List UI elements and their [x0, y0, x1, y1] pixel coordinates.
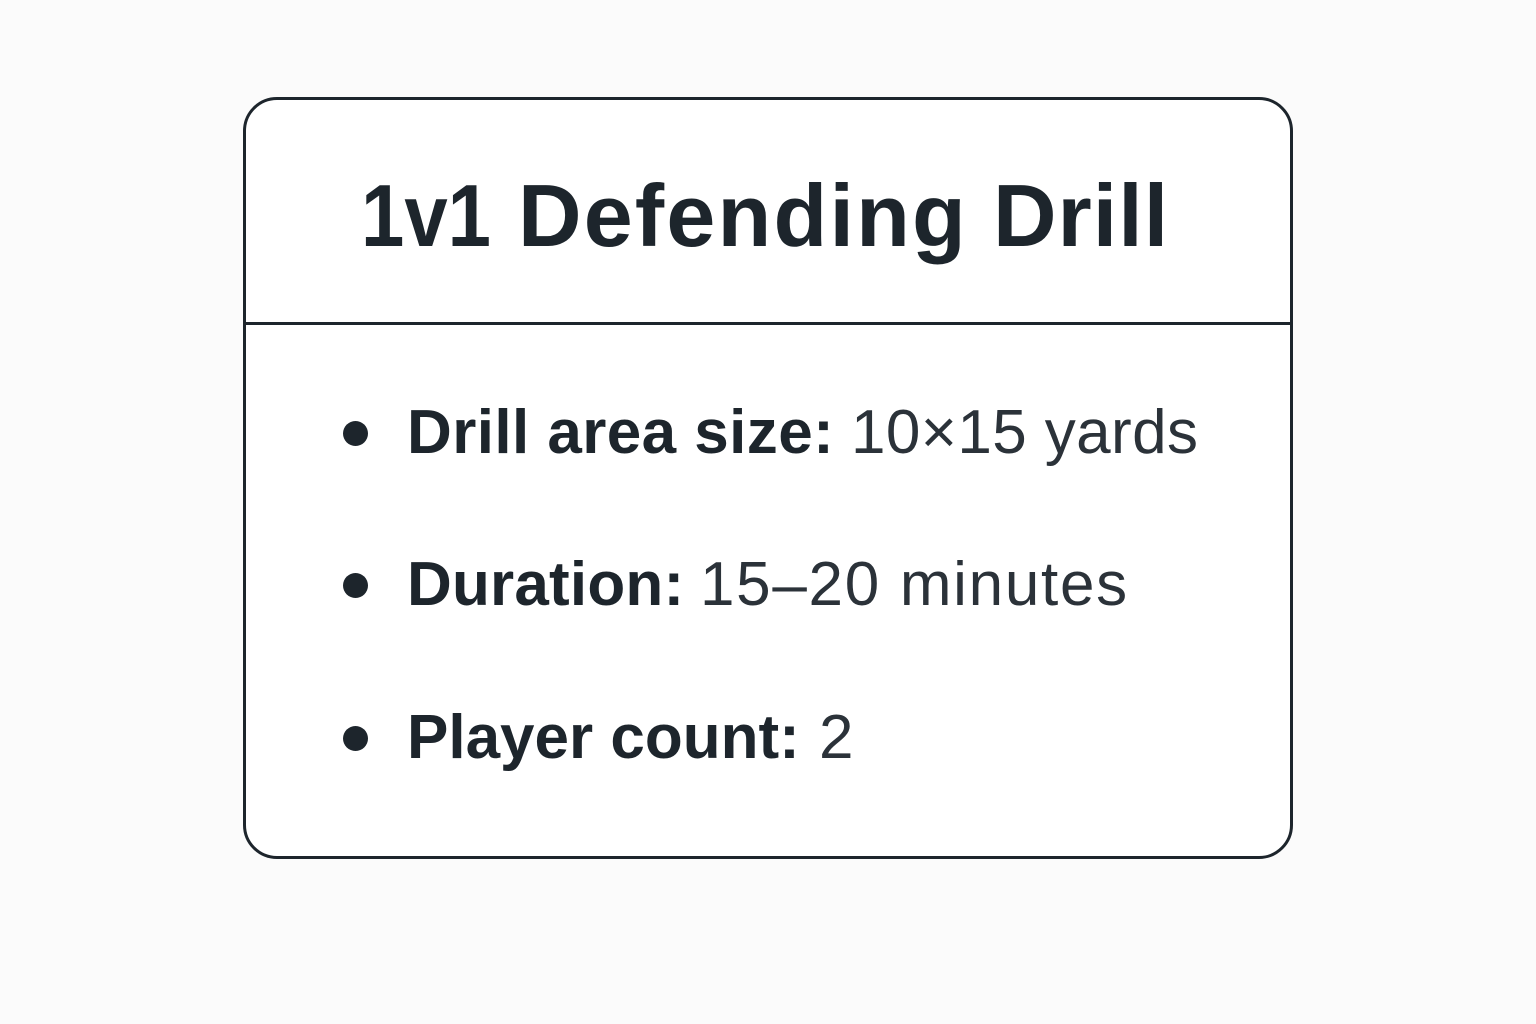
heading — [246, 100, 1290, 325]
list item: drill area size: Drill area size: — [407, 398, 834, 467]
list item: drill area size — [343, 398, 1198, 467]
list item: duration: Duration: — [407, 550, 684, 619]
heading: Defending — [518, 166, 968, 265]
list item: player count: Player count: — [407, 703, 800, 772]
heading: Drill — [993, 166, 1169, 265]
list item: duration — [343, 550, 1129, 619]
panel: drill card — [243, 97, 1293, 859]
list item: player count: 2 — [819, 703, 853, 772]
heading: 1v1 — [361, 166, 491, 265]
list item: drill area size: 10×15 yards — [851, 398, 1198, 467]
list item: duration: 15–20 minutes — [700, 550, 1129, 619]
